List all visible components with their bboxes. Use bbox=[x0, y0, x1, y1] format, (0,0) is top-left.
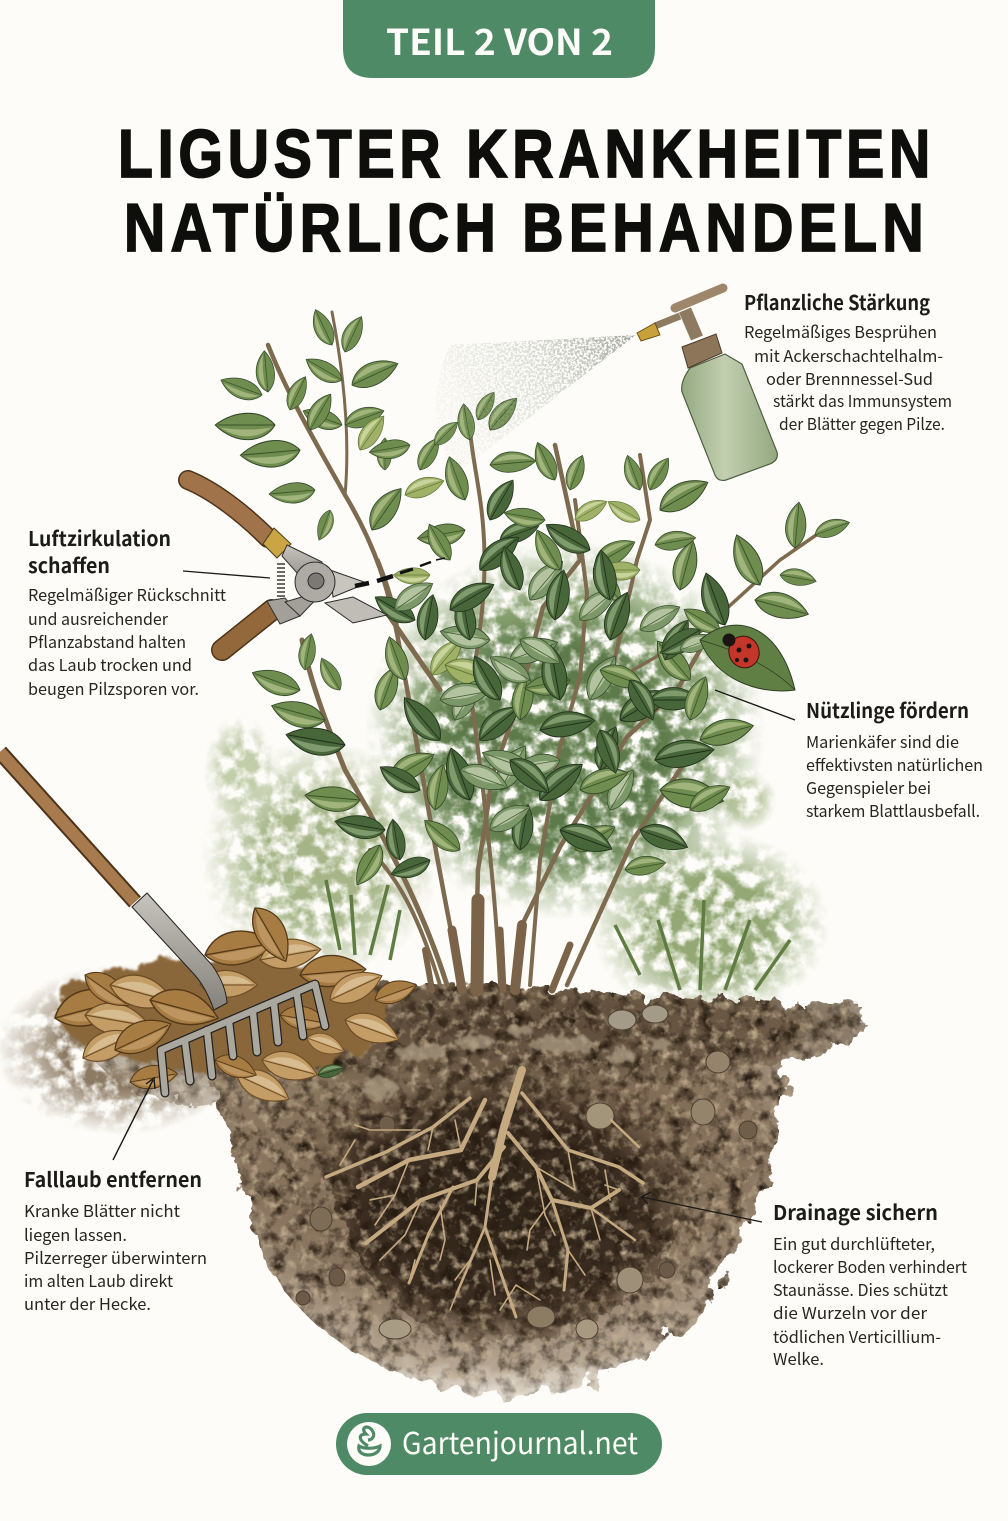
soil: sandy halo bbox=[205, 1035, 785, 1395]
label: Luftzirkulation schaffen: schaffen bbox=[28, 549, 110, 579]
leader arrow: drainage bbox=[641, 1192, 762, 1222]
label: Falllaub entfernen: Falllaub entfernen bbox=[24, 1163, 202, 1193]
label: Nützlinge fördern: Gegenspieler bei bbox=[806, 775, 931, 799]
label: Nützlinge fördern: starkem Blattlausbefall. bbox=[806, 798, 980, 822]
icon: logo bbox=[347, 1422, 391, 1466]
label: Nützlinge fördern: effektivsten natürlichen bbox=[806, 752, 983, 776]
leaf litter bbox=[50, 900, 420, 1110]
label: Drainage sichern: Staunässe. Dies schützt bbox=[773, 1277, 948, 1301]
label: Pflanzliche Stärkung: stärkt das Immunsystem bbox=[773, 388, 952, 412]
label: Falllaub entfernen: im alten Laub direkt bbox=[24, 1268, 173, 1292]
stones in soil bbox=[296, 1005, 757, 1339]
soil: light clods bbox=[362, 1025, 672, 1099]
label: Falllaub entfernen: Pilzerreger überwintern bbox=[24, 1245, 207, 1269]
soil: dark root zone bbox=[300, 1075, 695, 1341]
label: Falllaub entfernen: liegen lassen. bbox=[24, 1222, 127, 1246]
label: Drainage sichern: Welke. bbox=[773, 1346, 824, 1370]
leader arrow: leaf litter bbox=[113, 1078, 155, 1160]
label: Luftzirkulation schaffen: Luftzirkulation bbox=[28, 522, 171, 552]
title bbox=[118, 116, 930, 266]
footer badge bbox=[336, 1413, 662, 1475]
label: Drainage sichern bbox=[773, 1196, 967, 1370]
top tab: part label: TEIL 2 VON 2 bbox=[386, 14, 613, 66]
label: Pflanzliche Stärkung: der Blätter gegen Pilze. bbox=[779, 411, 945, 435]
leader line: shears bbox=[183, 571, 270, 578]
label: Luftzirkulation schaffen: Regelmäßiger Rückschnitt bbox=[28, 582, 226, 606]
label: Luftzirkulation schaffen: das Laub trocken und bbox=[28, 652, 192, 676]
wash behind canopy bbox=[365, 540, 765, 920]
label: Nützlinge fördern: Nützlinge fördern bbox=[806, 694, 969, 724]
title: LIGUSTER KRANKHEITEN bbox=[118, 116, 930, 192]
spray mist bbox=[436, 335, 636, 475]
icon: spray bottle bbox=[637, 288, 777, 480]
label: Falllaub entfernen: Kranke Blätter nicht bbox=[24, 1198, 180, 1222]
label: Pflanzliche Stärkung bbox=[744, 286, 952, 435]
soil: left fade of surface bbox=[0, 965, 245, 1135]
title: NATÜRLICH BEHANDELN bbox=[124, 190, 924, 266]
label: Drainage sichern: tödlichen Verticillium- bbox=[773, 1324, 941, 1348]
label: Falllaub entfernen: unter der Hecke. bbox=[24, 1291, 151, 1315]
label: Nützlinge fördern: Marienkäfer sind die bbox=[806, 729, 959, 753]
label: Luftzirkulation schaffen: beugen Pilzsporen vor. bbox=[28, 676, 199, 700]
label: Luftzirkulation schaffen bbox=[28, 522, 226, 700]
label: Drainage sichern: Ein gut durchlüfteter, bbox=[773, 1231, 935, 1255]
label: Falllaub entfernen bbox=[24, 1163, 207, 1315]
ladybird on leaf bbox=[700, 625, 795, 691]
top tab: part label bbox=[343, 0, 655, 78]
icon: pruning shears bbox=[188, 480, 387, 650]
label: Luftzirkulation schaffen: Pflanzabstand halten bbox=[28, 629, 186, 653]
label: Pflanzliche Stärkung: oder Brennnessel-Sud bbox=[766, 366, 933, 390]
roots bbox=[326, 1070, 643, 1317]
label: Drainage sichern: Drainage sichern bbox=[773, 1196, 938, 1226]
background shrubs bbox=[200, 715, 830, 1020]
label: Nützlinge fördern bbox=[806, 694, 983, 822]
soil: surface layer bbox=[60, 983, 862, 1105]
cut line dashed bbox=[355, 558, 445, 586]
label: Pflanzliche Stärkung: Pflanzliche Stärkung bbox=[744, 286, 930, 316]
label: Drainage sichern: lockerer Boden verhindert bbox=[773, 1254, 967, 1278]
footer badge: Gartenjournal.net bbox=[402, 1419, 638, 1463]
label: Luftzirkulation schaffen: und ausreichender bbox=[28, 606, 169, 630]
label: Drainage sichern: die Wurzeln vor der bbox=[773, 1300, 928, 1324]
label: Pflanzliche Stärkung: Regelmäßiges Besprühen bbox=[744, 319, 937, 343]
leader line: ladybird bbox=[715, 690, 795, 720]
icon: rake bbox=[0, 752, 325, 1093]
main stems bbox=[268, 312, 835, 990]
label: Pflanzliche Stärkung: mit Ackerschachtelhalm- bbox=[754, 343, 943, 367]
leaf canopy bbox=[215, 306, 852, 890]
